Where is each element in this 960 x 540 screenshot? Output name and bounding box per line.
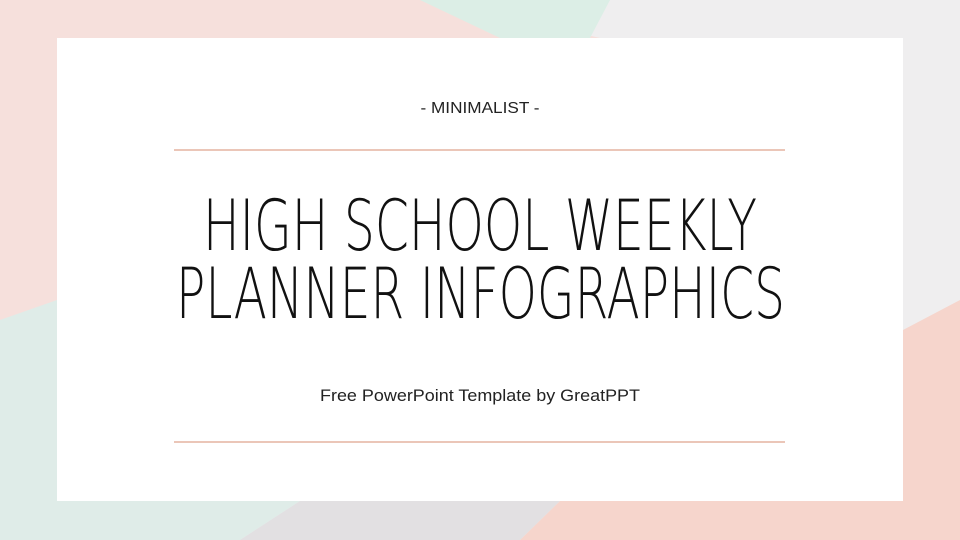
subtitle: Free PowerPoint Template by GreatPPT bbox=[320, 386, 640, 405]
white card bbox=[57, 38, 903, 501]
divider top bbox=[174, 149, 785, 151]
title bbox=[176, 185, 785, 335]
divider bottom bbox=[174, 441, 785, 443]
kicker: minimalist: - MINIMALIST - bbox=[420, 100, 540, 117]
